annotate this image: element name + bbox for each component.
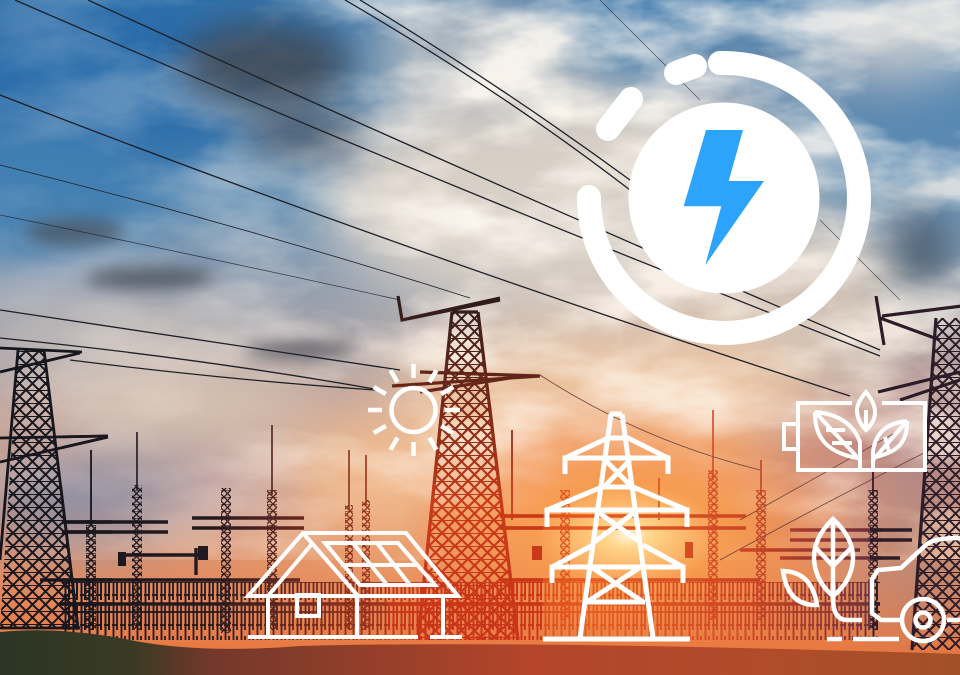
small leaf [783,571,817,605]
central pylon [388,292,543,642]
icon: plant and electric car [783,519,960,641]
sunset glow [398,405,858,665]
left pylon [0,345,112,635]
photo background: small dark clouds [25,218,355,358]
right leaf [873,421,907,470]
photo background: dark storm clouds [180,23,952,292]
icon: sun [368,364,460,456]
left leaf [815,412,860,470]
car [872,538,960,620]
ground [0,630,960,675]
icon: charging ring with lightning bolt [589,63,859,333]
substation silhouettes [62,405,882,640]
white disc [628,102,820,294]
photo background: warm horizon tint [49,335,960,654]
center leaf [857,392,875,430]
solar panel [325,543,435,585]
ring long segment [608,99,631,129]
ring short segment [676,66,695,73]
large leaf [814,519,862,620]
right pylon [870,292,960,652]
lightning bolt [684,130,764,265]
icon: battery with leaves [784,392,925,470]
icon: house with solar roof [248,533,462,637]
dashes [827,637,899,641]
icon: transmission tower [543,414,690,639]
ring progress arc [589,63,859,333]
